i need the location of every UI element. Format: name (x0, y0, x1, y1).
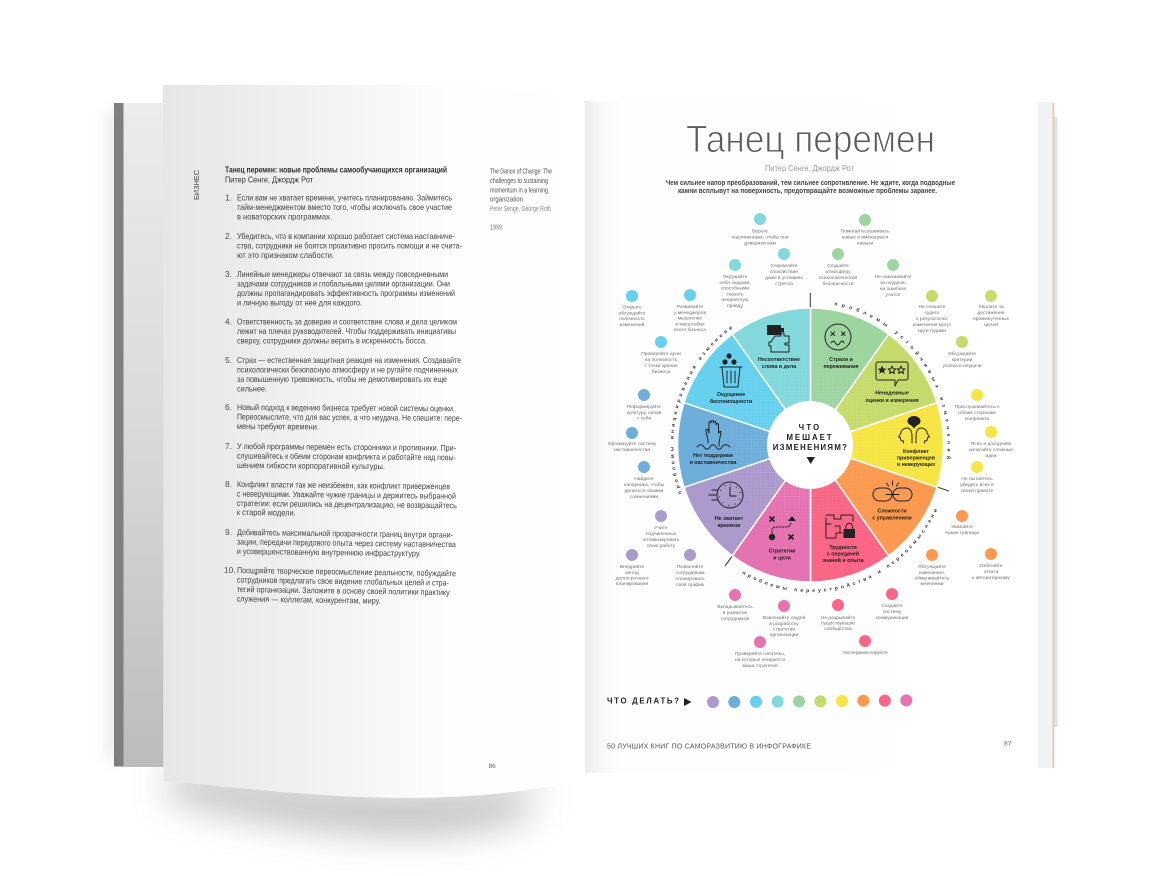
item 8: Конфликт власти так же неизбежен, как конфликт приверженцев (237, 479, 451, 491)
item 10: сотрудников предлагать свое видение глобальных целей и стра- (237, 574, 449, 588)
action: criteria: критерии (952, 358, 973, 363)
action: long-term planning: долгосрочного (616, 576, 649, 582)
action: respect boundaries: Уважайте (951, 523, 973, 530)
sidebar: original title: 1999 (490, 224, 502, 232)
action: involve people: стратегии (773, 628, 795, 632)
action: discuss usefulness: Открыто (622, 304, 642, 310)
action: check goals: бизнеса (652, 369, 670, 375)
action: business thinking: в масштабах (675, 321, 705, 327)
segment: knowledge transfer: с передачей (827, 550, 859, 558)
action: own schedule: свой график (676, 581, 705, 588)
action: do not judge early: судить (924, 311, 940, 316)
item 10: служения — коллегам, конкурентам, миру. (237, 593, 381, 606)
action: optimize work: оптимизировать (643, 538, 680, 543)
action: honest people: себя людьми, (719, 280, 751, 286)
action: keep communities: сообщества (824, 626, 852, 632)
action: safety: психологической (819, 274, 857, 281)
action: invest: в развитие (723, 611, 748, 616)
action: no punishment: за неудачи: (880, 281, 906, 286)
action: check goals: с точки зрения (644, 364, 678, 369)
action: invest: сотрудников (721, 617, 749, 622)
segment: no support: и наставничества (690, 460, 736, 466)
action: share opinions: обменивайтесь (915, 574, 950, 582)
action: mentoring: Организуйте систему (608, 440, 657, 447)
segment: helplessness (710, 353, 752, 405)
action: reform culture (627, 389, 662, 422)
item 3: должны пропагандировать эффективность программы изменений (237, 288, 455, 298)
action: mentoring (608, 427, 657, 453)
action: invest (717, 589, 753, 622)
legend: what to do: ЧТО ДЕЛАТЬ? (607, 696, 679, 706)
action: check goals: Проверяйте цели (641, 350, 681, 357)
action: do not convince: Не пытайтесь (961, 475, 993, 482)
item 5: 5. (225, 355, 232, 365)
wheel chart (670, 293, 951, 593)
action: do not convince: своей правоте (961, 487, 994, 494)
action: skills: навыки (857, 242, 873, 246)
center circle: МЕШАЕТ (786, 433, 834, 442)
action: honest people (719, 259, 751, 309)
item 8 (225, 479, 457, 519)
segment: management difficulties: Сложности (877, 508, 907, 514)
item 1: Если вам не хватает времени, учитесь планированию. Займитесь (237, 192, 452, 202)
ring captions: проблемы инициирования изменений (670, 326, 732, 494)
item 2: 2. (225, 231, 232, 241)
action: business thinking: Развивайте (677, 303, 703, 310)
action: criteria (942, 336, 982, 369)
segment: management difficulties: с управлением (872, 516, 912, 522)
item 7: слушивайтесь к обеим сторонам конфликта и работайте над повы- (237, 450, 456, 462)
action: invest: Вкладывайтесь (717, 603, 753, 610)
ring divider ticks (725, 293, 949, 566)
action: business thinking: мышление (678, 317, 703, 322)
segment: unreliable measures (865, 362, 919, 404)
item 6: 6. (225, 402, 232, 412)
action: do not convince (960, 461, 994, 494)
action: test hypotheses: Проверяйте гипотезы, (735, 650, 785, 657)
page number 86: 86 (488, 763, 496, 770)
action: praise (973, 290, 1009, 328)
wheel segments (678, 308, 943, 582)
center circle: ЧТО (799, 423, 821, 432)
action: listen (955, 389, 1000, 422)
action: own schedule: планировать (675, 577, 705, 582)
action: check goals: на полезность (645, 358, 678, 363)
right page sheet (584, 101, 1038, 773)
subtitle: authors: Питер Сенге, Джордж Рот (765, 164, 854, 173)
action: test hypotheses (735, 636, 785, 669)
action: involve people: в разработку (769, 621, 799, 627)
item 5: Страх — естественная защитная реакция на изменения. Создавайте (237, 355, 461, 365)
segment: word and deed mismatch (758, 325, 800, 370)
action: praise: целей (984, 321, 998, 328)
sidebar: original title: momentum in a learning (490, 188, 548, 194)
item 5: за повышенную тревожность, чтобы не демотивировать их еще (237, 374, 447, 384)
sidebar: original title: organization (490, 196, 523, 204)
action: praise: достижение (977, 311, 1005, 316)
action: explain: Ясно и доходчиво (971, 441, 1012, 447)
item 9: 9. (225, 527, 232, 537)
action: listen: Прислушивайтесь к (955, 403, 1000, 410)
action: keep communities (821, 599, 855, 632)
item 3: и личную выгоду от нее для каждого. (237, 298, 362, 308)
item 4: 4. (225, 316, 232, 326)
action: long-term planning: планирования (616, 582, 649, 587)
action: do not judge early: о результатах: (916, 317, 948, 322)
action: communications: систему (883, 610, 902, 615)
action: skills: новые и имеющиеся (842, 236, 889, 240)
item 1: 1. (225, 192, 232, 202)
item 2: ства, сотрудники не боятся проактивно просить помощи и не счита- (237, 240, 462, 250)
page number 87: 87 (1004, 740, 1012, 748)
action: calm (765, 248, 803, 287)
left page sheet (163, 85, 585, 798)
action: explain: излагайте сложные (969, 446, 1013, 453)
action: honest people: правду (727, 304, 744, 309)
item 3 (225, 269, 455, 308)
legend: what to do (607, 694, 912, 708)
segment: strategy and goals: и цели (773, 556, 791, 562)
left page heading: Питер Сенге, Джордж Рот (225, 174, 313, 184)
segment: no time (709, 482, 744, 529)
action: safety: Создайте (827, 262, 849, 269)
action: partner: делиться своими (625, 489, 664, 494)
lead paragraph: камни всплывут на поверхность, предотвращайте возможные проблемы заранее. (678, 186, 937, 195)
action: long-term planning: Внедряйте (620, 563, 644, 570)
action: avoid rollback: к авторитарному (972, 576, 1011, 581)
action: optimize work: Учите (654, 525, 668, 531)
lead paragraph: Чем сильнее напор преобразований, тем сильнее сопротивление. Не ждите, когда подводные (666, 178, 955, 187)
action: share opinions (915, 549, 950, 587)
left page heading (225, 164, 447, 184)
segment: fears (824, 324, 858, 370)
action: own schedule (675, 549, 705, 588)
item 7: У любой программы перемен есть сторонники и противники. При- (237, 441, 456, 453)
action: calm: Сохраняйте (770, 262, 798, 269)
action: optimize work (643, 510, 680, 549)
item 9: и усовершенствованную внутреннюю инфраструктуру. (237, 546, 421, 558)
action: own schedule: сотрудникам (676, 571, 705, 576)
item 4 (225, 316, 457, 346)
sidebar: original title: challenges to sustaining (490, 178, 548, 185)
segment: word and deed mismatch: Несоответствие (758, 357, 800, 363)
action: do not judge early: изменения могут (913, 323, 952, 328)
action: explain: идеи (985, 454, 997, 459)
action: long-term planning (616, 549, 649, 587)
action: reform culture: с себя (637, 416, 651, 422)
segment: believers conflict: и неверующих (897, 462, 935, 468)
lead paragraph (666, 178, 955, 195)
book spine and cover edge (114, 103, 164, 767)
action: trust: подчиненным, чтобы они (731, 234, 789, 240)
item 9 (225, 527, 456, 559)
action: share opinions: Обсуждайте (918, 563, 946, 570)
action: listen: обеим сторонам (958, 410, 996, 416)
item 6: мены требуют времени. (237, 421, 319, 432)
action: communications: Создайте (881, 602, 903, 609)
item 7: 7. (225, 441, 232, 451)
halftone overlay (718, 356, 905, 538)
section tab: business: БИЗНЕС (192, 169, 201, 200)
action: respect boundaries (945, 510, 980, 536)
action: calm: стресса (775, 282, 793, 287)
action: test hypotheses: на которые опирается (735, 658, 785, 663)
right page edge (1037, 102, 1058, 768)
action: honest people: способными (721, 286, 749, 292)
action: involve people (763, 600, 806, 638)
item 2: Убедитесь, что в компании хорошо работает система наставниче- (237, 231, 455, 241)
segment: helplessness: Ощущение (717, 392, 745, 398)
action: praise: промежуточных (973, 317, 1009, 322)
footer: book title: 50 ЛУЧШИХ КНИГ ПО САМОРАЗВИТИЮ В ИНФОГРАФИКЕ (607, 744, 811, 750)
action: own schedule: Позволяйте (677, 563, 704, 570)
item 9: зации, передачи передового опыта через систему наставничества (237, 536, 456, 549)
action: discuss usefulness (619, 290, 646, 328)
action: do not judge early (913, 290, 952, 334)
action: experiment (842, 635, 888, 656)
item 3: задачами сотрудников и глобальными целями организации. Они (237, 278, 450, 288)
action: reform culture: культуру, начав (627, 411, 662, 416)
item 4: Ответственность за доверие и соответствие слова и дела целиком (237, 316, 457, 326)
action: involve people: организации (770, 633, 799, 638)
segment: knowledge transfer: знаний и опыта (822, 557, 864, 564)
action: mentoring: наставничества (614, 448, 650, 453)
action: avoid rollback (972, 548, 1011, 581)
sidebar: original title: The Dance of Change: The (490, 168, 552, 176)
action: avoid rollback: отката (984, 570, 999, 575)
segment: no time: Не хватает (715, 516, 744, 522)
action: no punishment: на ошибках (880, 286, 907, 292)
action: no punishment: Не наказывайте (875, 273, 912, 280)
segment: fears: Страхи и (829, 357, 853, 363)
action: trust: доверяли вам (744, 242, 776, 246)
action: business thinking (674, 289, 706, 333)
item 8: 8. (225, 479, 232, 489)
segment: believers conflict (897, 416, 936, 468)
action: praise: Хвалите за (978, 304, 1004, 310)
segment: no support (690, 420, 736, 466)
action: no punishment: учатся (886, 293, 901, 298)
item 5: психологически безопасную атмосферу и не ругайте подчиненных (237, 364, 459, 374)
action: test hypotheses: ваша стратегия (742, 664, 778, 669)
action: calm: даже в условиях (765, 276, 803, 281)
segment: believers conflict: Конфликт (903, 448, 929, 455)
item 7 (225, 441, 456, 472)
center circle (767, 401, 853, 489)
item 6: Новый подход к ведению бизнеса требует новой системы оценки. (237, 402, 455, 413)
action: no punishment (875, 259, 912, 298)
action: calm: спокойствие (770, 268, 798, 275)
ring captions: проблемы переустройства и переосмысления (742, 508, 937, 593)
sidebar: original title: Peter Senge, George Roth (490, 206, 551, 213)
item 1: тайм-менеджментом вместо того, чтобы исключать свое участие (237, 202, 452, 212)
action: communications (876, 588, 909, 621)
action: partner (624, 461, 665, 500)
action: communications: коммуникации (876, 616, 909, 621)
item 6 (225, 402, 462, 432)
segment: unreliable measures: оценки и измерения (865, 398, 919, 404)
segment: unreliable measures: Ненадежные (875, 390, 909, 396)
action: do not judge early: Не спешите (919, 304, 946, 310)
action: honest people: Окружайте (723, 273, 748, 280)
item 2: ют это признаком слабости. (237, 250, 334, 260)
ring captions: проблемы устойчивых изменений (834, 302, 951, 459)
action: partner: сомнениями (630, 495, 658, 500)
item 2 (225, 231, 462, 260)
item 8: с неверующими. Уважайте чужие границы и держитесь выбранной (237, 488, 456, 501)
action: trust (731, 213, 789, 246)
item 10: Поощряйте творческое переосмысление реальности, побуждайте (237, 565, 456, 578)
action: optimize work: подчиненных (646, 532, 677, 537)
item 9: Добивайтесь максимальной прозрачности границ внутри органи- (237, 527, 453, 540)
item 3: Линейные менеджеры отвечают за связь между повседневными (237, 269, 448, 279)
action: listen: конфликта (965, 416, 989, 422)
action: avoid rollback: Избегайте (979, 562, 1003, 569)
ring captions (670, 302, 951, 593)
action: criteria: успеха и неудачи (942, 364, 982, 369)
segment: helplessness: беспомощности (710, 398, 752, 405)
item 6: Переосмыслите, что для вас успех, а что неудача. Не спешите: пере- (237, 411, 462, 423)
title: Танец перемен (686, 119, 935, 161)
action: check goals (641, 336, 681, 375)
action: safety (819, 248, 857, 287)
action: partner: Найдите (634, 475, 654, 482)
action: discuss usefulness: полезность (619, 317, 645, 322)
segment: strategy and goals: Стратегии (769, 548, 795, 554)
action: keep communities: существующие (821, 622, 855, 626)
center circle: ИЗМЕНЕНИЯМ? (773, 443, 848, 452)
item 1 (225, 192, 452, 222)
segment: management difficulties (872, 481, 912, 522)
action: optimize work: свою работу (647, 543, 676, 549)
action: respect boundaries: чужие границы (945, 531, 980, 536)
action: business thinking: у менеджеров (674, 311, 706, 316)
sidebar: original title (490, 168, 552, 232)
action: involve people: Вовлекайте людей (763, 614, 806, 621)
item 5: сильнее. (237, 384, 267, 394)
book drop shadow (108, 110, 540, 830)
action: do not convince: убедить всех в (960, 482, 994, 488)
action: experiment: Экспериментируйте (842, 649, 888, 656)
item 8: к старой модели. (237, 507, 296, 518)
segment: strategy and goals (769, 516, 796, 562)
left page heading: Танец перемен: новые проблемы самообучающихся организаций (225, 164, 447, 174)
action: explain (969, 426, 1013, 459)
action: business thinking: всего бизнеса (674, 327, 706, 333)
segment: fears: переживания (824, 364, 858, 370)
action: safety: атмосферу (825, 269, 851, 275)
action: honest people: сказать (726, 292, 744, 297)
action: skills (841, 214, 890, 246)
action: do not judge early: идти годами (918, 329, 946, 334)
item 4: сверху, сотрудники должны верить в искренность босса. (237, 336, 427, 346)
action: honest people: неприятную (721, 298, 749, 303)
segment: no support: Нет поддержки (693, 453, 733, 459)
segment: believers conflict: приверженцев (897, 456, 936, 462)
item 10: 10. (224, 565, 236, 575)
action: share opinions: изменения, (919, 571, 945, 576)
action: share opinions: мнениями (921, 582, 944, 587)
action: discuss usefulness: обсуждайте (619, 309, 646, 316)
action: discuss usefulness: изменений (620, 321, 645, 328)
action: partner: напарника, чтобы (624, 482, 665, 488)
segment: word and deed mismatch: слова и дела (762, 364, 796, 370)
segment: no time: времени (718, 523, 740, 529)
item 5 (225, 355, 461, 394)
action: safety: безопасности (823, 281, 854, 287)
item 1: в новаторских программах. (237, 212, 332, 222)
action: reform culture: Реформируйте (627, 403, 661, 410)
item 3: 3. (225, 269, 232, 279)
item 10 (224, 565, 456, 607)
item 10: тегий организации. Заложите в основу своей политики практику (237, 584, 451, 597)
item 7: шением гибкости корпоративной культуры. (237, 460, 385, 471)
item 4: лежит на плечах руководителей. Чтобы поддерживать инициативы (237, 326, 456, 336)
action: keep communities: Не разрывайте (821, 614, 855, 621)
item 8: стратегии: если решились на децентрализацию, не возвращайтесь (237, 498, 457, 510)
action: skills: Помогайте развивать (841, 228, 890, 234)
segment: knowledge transfer (822, 515, 864, 564)
action: long-term planning: метод (625, 571, 639, 576)
segment: knowledge transfer: Трудности (829, 545, 857, 551)
action: criteria: Обсуждайте (948, 350, 976, 357)
action: trust: Верьте (752, 228, 768, 234)
